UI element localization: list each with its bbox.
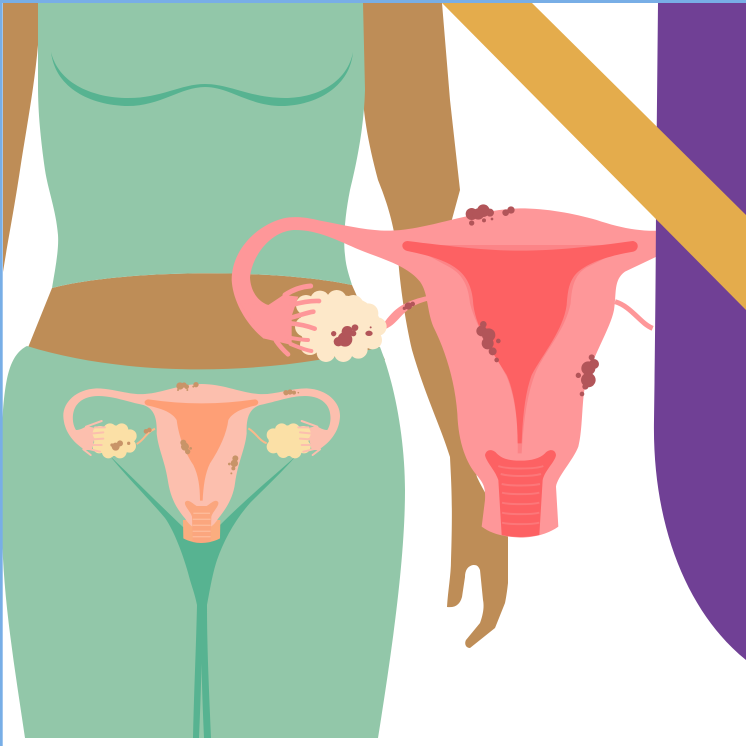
large ovary: [295, 290, 387, 362]
small cervix stem: [185, 501, 218, 543]
large uterus body: [232, 208, 660, 538]
small left ovary: [93, 423, 137, 458]
left ligament: [383, 296, 428, 330]
fimbria palm: [240, 295, 292, 345]
small cervix base: [183, 520, 220, 543]
large uterine cavity rim: [408, 245, 632, 453]
small uterus diagram: [63, 382, 340, 543]
lower body: [1, 346, 405, 738]
fimbria fingers: [276, 286, 319, 354]
right ligament: [615, 302, 653, 328]
pelvic V shading: [110, 456, 296, 738]
large uterus diagram: [232, 204, 660, 538]
small fimbria fingers: [83, 421, 320, 455]
small uterus body: [63, 384, 340, 530]
waist: [27, 273, 385, 385]
gold ribbon band: [442, 3, 746, 310]
large cervix: [485, 450, 556, 537]
right arm and hand: [363, 3, 508, 648]
small endometriosis spots: [110, 382, 299, 474]
upper torso: [38, 3, 365, 288]
small right ovary: [267, 423, 311, 458]
small ligaments: [137, 428, 267, 444]
chest line: [51, 52, 353, 106]
small cervix ridges: [193, 513, 211, 537]
left arm: [3, 3, 39, 272]
large uterine cavity: [402, 241, 638, 443]
endometriosis spots: [331, 204, 599, 396]
cervix ridges: [498, 466, 543, 524]
small uterine cavity: [145, 399, 258, 501]
purple ribbon panel: [654, 3, 746, 660]
